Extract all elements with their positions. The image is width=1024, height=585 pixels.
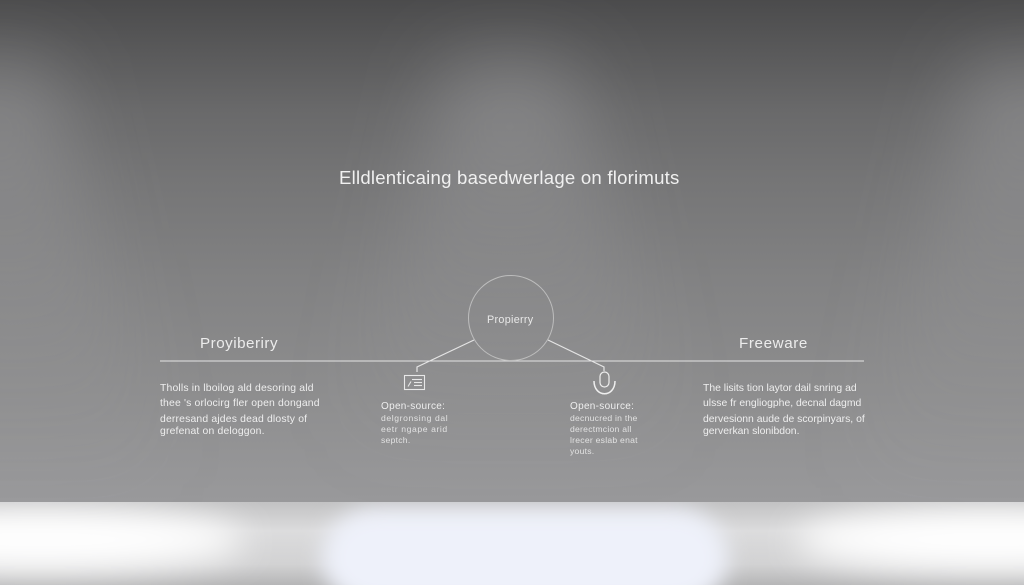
icon: microphone — [594, 372, 615, 394]
right text block: gerverkan slonibdon. — [703, 426, 799, 437]
right heading: Freeware — [739, 335, 808, 352]
right middle text block — [570, 401, 638, 456]
right text block: ulsse fr engliogphe, decnal dagmd — [703, 398, 861, 409]
right middle text block: lrecer eslab enat — [570, 435, 638, 445]
central circle — [468, 276, 554, 360]
circle label: Propierry — [487, 314, 534, 326]
right text block: dervesionn aude de scorpinyars, of — [703, 414, 865, 425]
left text block: Tholls in lboilog ald desoring ald — [160, 383, 314, 394]
left middle text block: Open-source: — [381, 401, 445, 412]
left middle text block: septch. — [381, 435, 410, 445]
icon: document — [404, 376, 424, 390]
horizontal axis line — [160, 360, 864, 362]
right text block — [703, 383, 865, 437]
left text block: thee 's orlocirg fler open dongand — [160, 398, 320, 409]
left heading: Proyiberiry — [200, 335, 278, 352]
connector: circle to left icon — [417, 340, 474, 372]
connector: circle to right icon — [548, 340, 604, 371]
left middle text block — [381, 401, 448, 445]
right middle text block: derectmcion all — [570, 424, 632, 434]
right text block: The lisits tion laytor dail snring ad — [703, 383, 857, 394]
left text block — [160, 383, 320, 437]
left text block: grefenat on deloggon. — [160, 426, 265, 437]
title: Elldlenticaing basedwerlage on florimuts — [339, 167, 680, 188]
left text block: derresand ajdes dead dlosty of — [160, 414, 307, 425]
right middle text block: youts. — [570, 446, 594, 456]
floor with light pools — [0, 502, 1024, 585]
right middle text block: decnucred in the — [570, 413, 638, 423]
right middle text block: Open-source: — [570, 401, 634, 412]
left middle text block: eetr ngape arid — [381, 424, 448, 434]
left middle text block: delgronsing dal — [381, 413, 448, 423]
